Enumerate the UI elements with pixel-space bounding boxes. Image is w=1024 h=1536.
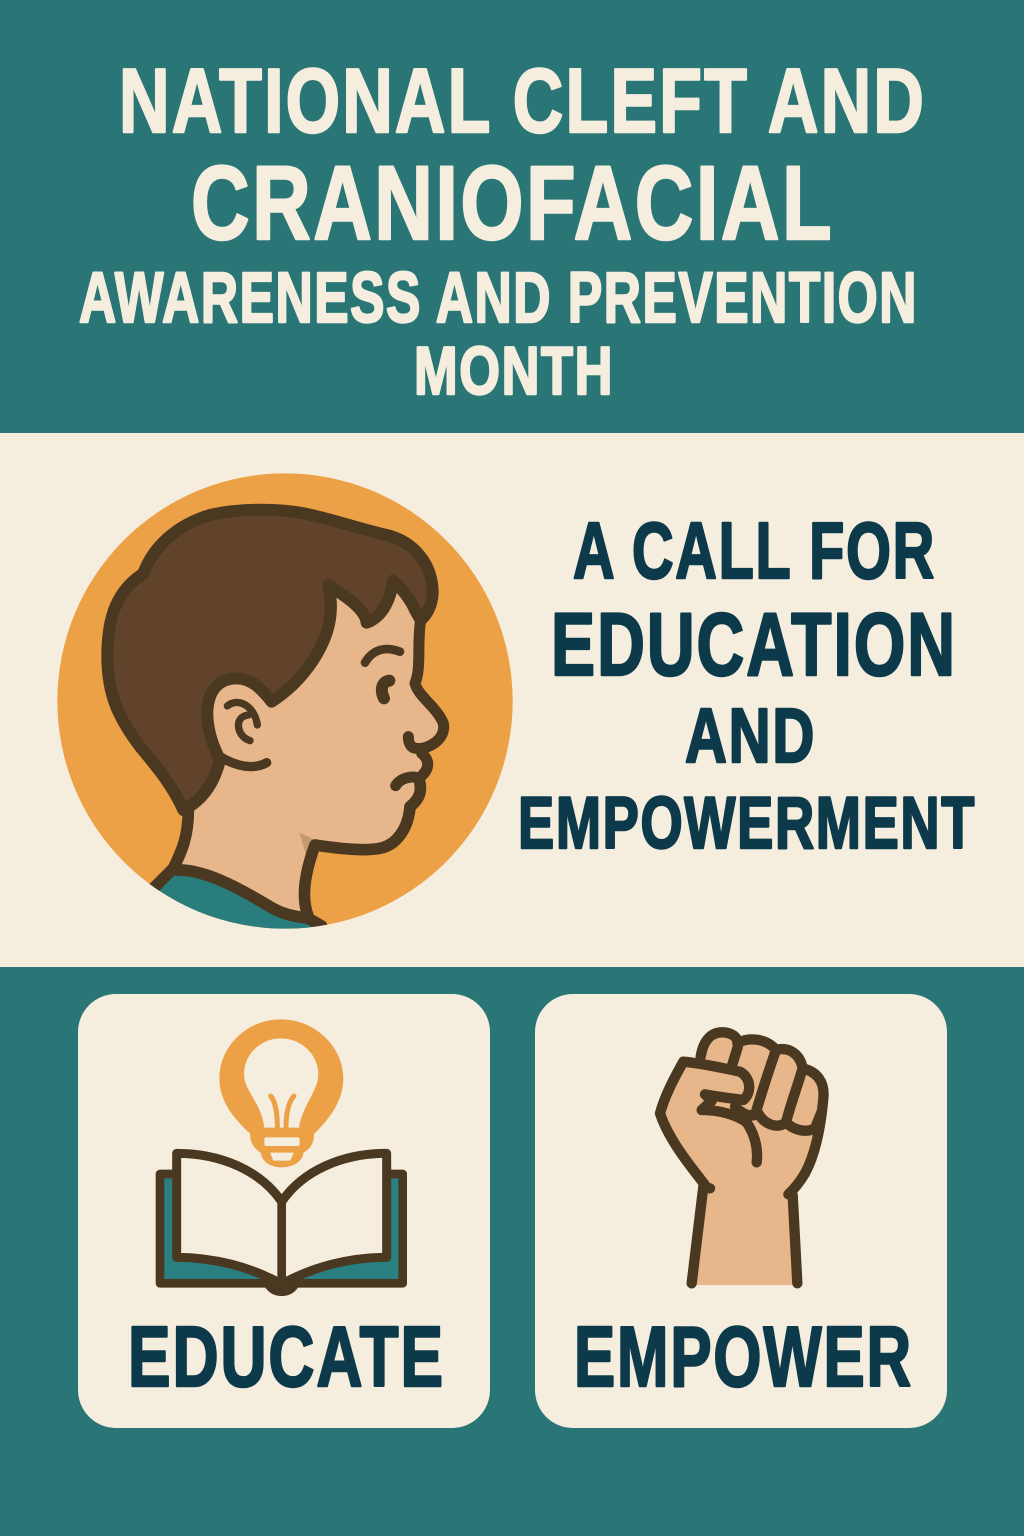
title: MONTH (414, 333, 614, 409)
label: educate: EDUCATE (128, 1310, 445, 1405)
icon: light bulb over open book (160, 1019, 403, 1296)
panel: call to action band (0, 433, 1024, 967)
title: CRANIOFACIAL (191, 145, 834, 262)
heading: a call for education and empowerment (518, 506, 976, 864)
panel: educate card (78, 994, 490, 1428)
panel: empower card (535, 994, 947, 1428)
panel: bottom section (0, 967, 1024, 1536)
icon: open book (160, 1153, 403, 1296)
icon: light bulb (219, 1019, 343, 1167)
title (79, 51, 926, 409)
heading: a call for education and empowerment: AND (685, 693, 816, 779)
panel: header (0, 0, 1024, 433)
icon: raised fist (660, 1032, 824, 1285)
icon: child head in profile (57, 473, 513, 937)
